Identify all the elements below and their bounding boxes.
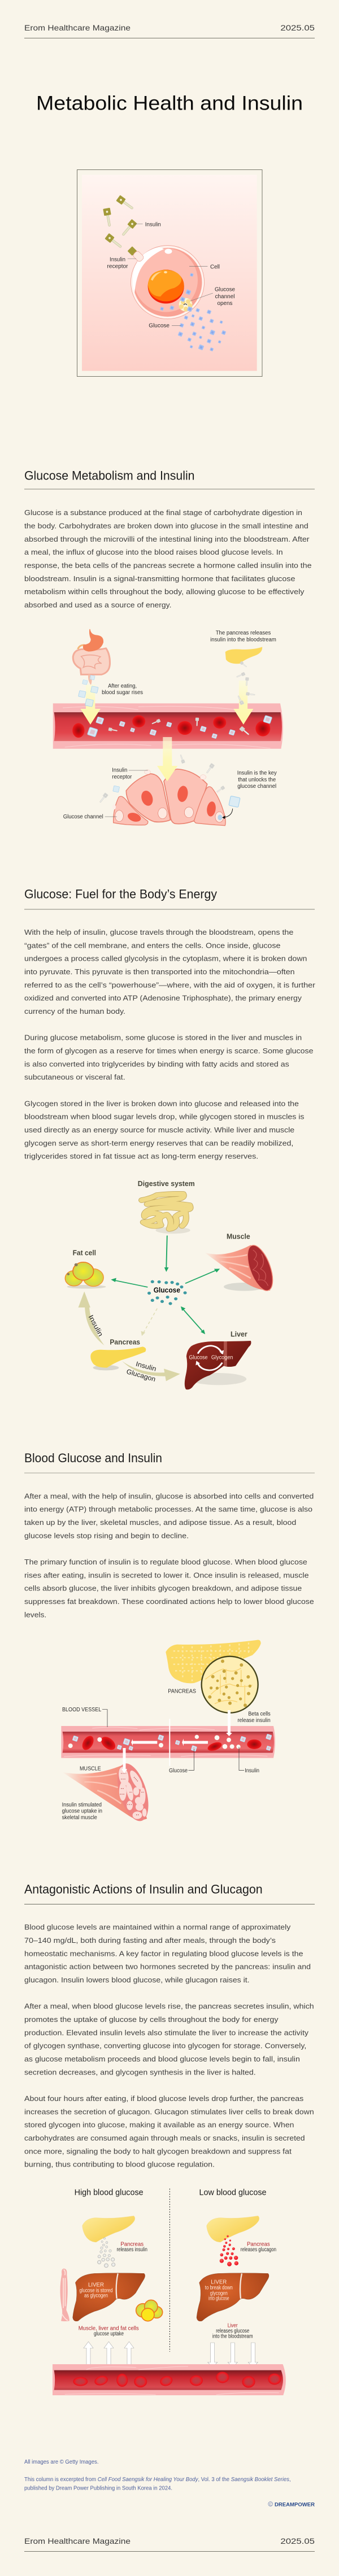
footer: Erom Healthcare Magazine — [24, 2536, 131, 2546]
heading: antagonistic actions: Antagonistic Actions of Insulin and Glucagon — [24, 1882, 263, 1896]
labels: Insulin — [110, 256, 125, 263]
text block: antagonistic actions: secretion decreases, and glycogen synthesis in the liver is halted. — [24, 2068, 256, 2076]
text block: blood glucose: glucose levels stop rising and begin to decline. — [24, 1531, 189, 1540]
labels: Insulin — [87, 1314, 105, 1338]
text block: glucose metabolism — [24, 508, 312, 609]
text block: glucose metabolism: absorbed through the microvilli of the intestinal lining into the bloodstream. After — [24, 535, 310, 543]
text block: antagonistic actions: homeostatic mechanisms. A key factor in regulating blood glucose levels is the — [24, 1949, 303, 1958]
labels: low glucose: to break down — [205, 2285, 233, 2291]
labels: that unlocks the — [238, 777, 276, 783]
arrow: insulin into blood — [233, 681, 253, 725]
text block: glucose fuel: currency of the human body. — [24, 1007, 125, 1015]
footer: 2025.05 — [280, 2536, 315, 2546]
text block: antagonistic actions: once more, signaling the body to halt glycogen breakdown and suppress fat — [24, 2147, 292, 2155]
icon: muscle — [205, 1243, 278, 1293]
labels: low glucose: into the bloodstream — [212, 2333, 253, 2339]
text block: glucose fuel: oxidized and converted into ATP (Adenosine Triphosphate), the primary energy — [24, 994, 302, 1002]
text block: glucose metabolism: response, the beta cells of the pancreas secrete a hormone called insulin into the — [24, 561, 312, 570]
arrow: insulin to cells — [157, 737, 177, 781]
labels: skeletal muscle — [62, 1815, 97, 1821]
text block: antagonistic actions: After a meal, when blood glucose levels rise, the pancreas secretes insulin, which — [24, 2002, 314, 2011]
text block: glucose fuel: During glucose metabolism, some glucose is stored in the liver and muscles in — [24, 1034, 302, 1042]
credits: All images are © Getty Images. — [24, 2459, 98, 2465]
labels: low glucose — [205, 2241, 276, 2339]
labels — [63, 630, 277, 820]
header — [24, 23, 315, 38]
labels: low glucose: Pancreas — [247, 2241, 270, 2248]
figure: digestion to bloodstream and cells — [53, 629, 283, 826]
text block: glucose metabolism: Glucose is a substance produced at the final stage of carbohydrate digestion in — [24, 508, 302, 517]
text block: blood glucose: suppresses fat breakdown. These coordinated actions help to lower blood glucose — [24, 1597, 314, 1606]
text block: blood glucose — [24, 1492, 314, 1619]
labels: low glucose: into glucose — [208, 2296, 229, 2302]
icon: pancreas with beta cell lens — [166, 1640, 261, 1713]
icon: muscle — [62, 1761, 154, 1824]
figure: insulin opens cell glucose channel — [77, 169, 262, 376]
labels: MUSCLE — [80, 1766, 101, 1772]
footer — [24, 2536, 315, 2552]
arrows: glucose entering blood — [208, 2343, 258, 2368]
heading: glucose fuel: Glucose: Fuel for the Body’s Energy — [24, 887, 217, 901]
blood vessel — [53, 703, 283, 749]
publisher logo: DREAMPOWER — [275, 2501, 315, 2508]
labels: low glucose: releases glucagon — [241, 2247, 276, 2253]
icon: pancreas — [90, 1346, 146, 1370]
labels: Beta cells — [248, 1711, 271, 1718]
heading: blood glucose: Blood Glucose and Insulin — [24, 1451, 162, 1465]
labels: Fat cell — [73, 1249, 96, 1257]
labels: After eating, — [108, 683, 137, 689]
labels: Insulin is the key — [237, 770, 277, 777]
credits: published by Dream Power Publishing in South Korea in 2024. — [24, 2485, 172, 2491]
text block: glucose fuel: subcutaneous or visceral fat. — [24, 1073, 125, 1082]
labels: Glucose — [154, 1287, 180, 1294]
text block: antagonistic actions: antagonistic action between two hormones secreted by the pancreas: insulin and — [24, 1963, 311, 1971]
labels: low glucose: Liver — [228, 2322, 238, 2329]
labels — [107, 222, 235, 329]
text block: antagonistic actions: promotes the uptake of glucose by cells throughout the body for energy — [24, 2015, 279, 2024]
heading: high blood glucose: High blood glucose — [75, 2188, 144, 2198]
labels: glucose channel — [237, 783, 276, 790]
figure: high versus low blood glucose — [53, 2188, 286, 2395]
labels: high glucose — [79, 2241, 147, 2337]
text block: blood glucose: levels. — [24, 1610, 46, 1619]
labels — [62, 1689, 271, 1821]
icon: insulin keys — [103, 195, 137, 256]
text block: glucose metabolism: the body. Carbohydrates are broken down into glucose in the small intestine and — [24, 521, 308, 530]
credits: This column is excerpted from Cell Food Saengsik for Healing Your Body, Vol. 3 of the Saengsik Booklet Series, — [24, 2476, 291, 2483]
text block: antagonistic actions: as glucose metabolism proceeds and blood glucose levels begin to fall, insulin — [24, 2055, 300, 2063]
blood vessel — [61, 1726, 275, 1758]
divider — [169, 2189, 170, 2352]
text block: glucose fuel — [24, 928, 316, 1161]
labels: Insulin — [112, 768, 127, 774]
text block: glucose fuel: With the help of insulin, glucose travels through the bloodstream, opens the — [24, 928, 293, 936]
text block: antagonistic actions: glucagon. Insulin lowers blood glucose, while glucagon raises it. — [24, 1976, 250, 1984]
arrows: glucose leaving blood — [84, 2342, 134, 2366]
panel: low glucose organs — [197, 2216, 269, 2321]
text block: antagonistic actions: About four hours after eating, if blood glucose levels drop further, the pancreas — [24, 2094, 304, 2103]
labels: high glucose: releases insulin — [117, 2247, 147, 2253]
labels: high glucose: LIVER — [88, 2282, 104, 2288]
text block: antagonistic actions: stored glycogen into glucose, making it available as an energy source. When — [24, 2121, 294, 2129]
text block: glucose fuel: is also converted into triglycerides by binding with fatty acids and stored as — [24, 1060, 289, 1068]
credits — [24, 2459, 291, 2491]
icons: glucose and insulin entering — [79, 661, 255, 707]
figure: pancreas beta cells, vessel, muscle — [61, 1640, 275, 1824]
labels: high glucose: as glycogen — [84, 2293, 108, 2299]
labels: Glucose — [189, 1355, 208, 1361]
icon: glucose channel — [179, 298, 192, 311]
figure: glucose distribution network — [65, 1180, 278, 1389]
text block: blood glucose: The primary function of insulin is to regulate blood glucose. When blood glucose — [24, 1558, 307, 1566]
text block: glucose fuel: Glycogen stored in the liver is broken down into glucose and released into the — [24, 1099, 299, 1108]
header: 2025.05 — [280, 23, 315, 32]
text block: antagonistic actions: production. Elevated insulin levels also stimulate the liver to increase the activity — [24, 2028, 309, 2037]
text block: blood glucose: taken up by the liver, skeletal muscles, and adipose tissue. As a result, blood — [24, 1518, 296, 1527]
heading: low blood glucose: Low blood glucose — [199, 2188, 267, 2198]
text block: antagonistic actions: of glycogen synthase, converting glucose into glycogen for storage. Conversely, — [24, 2042, 306, 2050]
labels: insulin into the bloodstream — [210, 637, 276, 643]
text block: glucose metabolism: a meal, the influx of glucose into the blood raises blood glucose levels. In — [24, 548, 283, 556]
labels: low glucose: releases glucose — [216, 2328, 250, 2334]
labels: opens — [217, 300, 233, 307]
text block: glucose fuel: “gates” of the cell membrane, and enters the cells. Once inside, glucose — [24, 941, 280, 949]
labels: PANCREAS — [168, 1689, 196, 1695]
labels: Glucagon — [125, 1367, 157, 1383]
heading: glucose metabolism: Glucose Metabolism and Insulin — [24, 469, 194, 483]
labels: high glucose: Muscle, liver and fat cells — [79, 2325, 139, 2332]
text block: glucose metabolism: metabolism within cells throughout the body, allowing glucose to be effectively — [24, 587, 305, 596]
labels: Glycogen — [211, 1355, 233, 1361]
text block: blood glucose: rises after eating, insulin is secreted to lower it. Once insulin is released, muscle — [24, 1571, 308, 1579]
icon: liver — [185, 1341, 251, 1389]
arrows: hormones — [79, 1292, 180, 1381]
icon: pancreas — [225, 647, 262, 664]
labels: release insulin — [237, 1718, 271, 1724]
labels: high glucose: Pancreas — [120, 2241, 144, 2248]
labels: Liver — [231, 1331, 247, 1339]
text block: glucose fuel: undergoes a process called glycolysis in the cytoplasm, where it is broken down — [24, 954, 307, 963]
text block: blood glucose: cells absorb glucose, the liver inhibits glycogen breakdown, and adipose tissue — [24, 1584, 302, 1593]
text block: glucose fuel: triglycerides stored in fat tissue act as long-term energy reserves. — [24, 1152, 258, 1161]
labels — [73, 1180, 250, 1383]
labels: high glucose: glucose is stored — [79, 2287, 113, 2294]
labels: glucose uptake in — [62, 1808, 102, 1815]
text block: glucose fuel: into pyruvate. This pyruvate is then transported into the mitochondria—often — [24, 967, 295, 976]
labels: low glucose: LIVER — [211, 2279, 227, 2285]
labels: blood sugar rises — [102, 690, 143, 696]
labels: receptor — [107, 263, 128, 270]
text block: antagonistic actions: burning, thus contributing to blood glucose regulation. — [24, 2160, 215, 2169]
labels: Glucose — [149, 322, 169, 329]
labels: The pancreas releases — [216, 630, 271, 637]
text block: glucose fuel: bloodstream when blood sugar levels drop, while glycogen stored in muscles is — [24, 1113, 305, 1121]
labels: receptor — [112, 774, 132, 781]
arrow: dashed to pancreas — [141, 1309, 157, 1336]
text block: glucose fuel: referred to as the cell’s “powerhouse”—where, with the aid of oxygen, it is further — [24, 980, 316, 989]
publisher logo: C — [269, 2503, 272, 2507]
labels: Cell — [210, 264, 220, 271]
arrows: glucose flow — [111, 1236, 220, 1334]
text block: antagonistic actions — [24, 1923, 314, 2169]
labels: Pancreas — [110, 1339, 140, 1346]
blood vessel — [53, 2364, 286, 2395]
text block: blood glucose: into energy (ATP) through metabolic processes. At the same time, glucose is also — [24, 1505, 312, 1514]
labels: Muscle — [227, 1232, 250, 1240]
icon: cells — [98, 754, 240, 826]
header: Erom Healthcare Magazine — [24, 23, 131, 32]
text block: blood glucose: After a meal, with the help of insulin, glucose is absorbed into cells and converted — [24, 1492, 314, 1500]
icon: cell with nucleus — [131, 246, 205, 319]
labels: Insulin — [245, 1768, 259, 1774]
text block: antagonistic actions: increases the secretion of glucagon. Glucagon stimulates liver cells to break down — [24, 2107, 314, 2116]
labels: channel — [215, 294, 235, 300]
text block: antagonistic actions: Blood glucose levels are maintained within a normal range of approximately — [24, 1923, 291, 1932]
text block: glucose metabolism: bloodstream. Insulin is a signal-transmitting hormone that facilitates glucose — [24, 574, 295, 583]
icon: glucose dots — [147, 1280, 187, 1305]
title: Metabolic Health and Insulin — [36, 93, 303, 115]
text block: glucose metabolism: absorbed and used as a source of energy. — [24, 600, 172, 609]
text block: antagonistic actions: carbohydrates are consumed again through meals or snacks, insulin is secreted — [24, 2134, 305, 2142]
labels: Digestive system — [138, 1180, 195, 1188]
arrow: glucose into blood — [80, 685, 101, 725]
labels: Insulin — [135, 1360, 157, 1373]
labels: Glucose — [169, 1768, 188, 1774]
labels: Glucose — [215, 286, 235, 293]
labels: high glucose: glucose uptake — [94, 2331, 124, 2337]
labels: Glucose channel — [63, 814, 103, 820]
icon: fat cells — [65, 1262, 106, 1289]
labels: Insulin — [145, 222, 161, 228]
text block: glucose fuel: used directly as an energy source for muscle activity. While liver and muscle — [24, 1126, 294, 1134]
icon: digestive system — [142, 1194, 190, 1233]
labels: Insulin stimulated — [62, 1802, 102, 1808]
labels: low glucose: glycogen — [210, 2290, 228, 2296]
text block: antagonistic actions: 70–140 mg/dL, both during fasting and after meals, through the body’s — [24, 1936, 276, 1945]
labels: BLOOD VESSEL — [62, 1707, 102, 1713]
icon: stomach and intestines — [73, 629, 110, 685]
panel: high glucose organs — [60, 2216, 163, 2321]
text block: glucose fuel: glycogen serve as short-term energy reserves that can be readily mobilized, — [24, 1139, 293, 1147]
icon: glucose molecules — [160, 273, 226, 351]
text block: glucose fuel: the form of glycogen as a reserve for times when energy is scarce. Some glucose — [24, 1047, 313, 1055]
arrows: insulin flow — [121, 1710, 232, 1773]
